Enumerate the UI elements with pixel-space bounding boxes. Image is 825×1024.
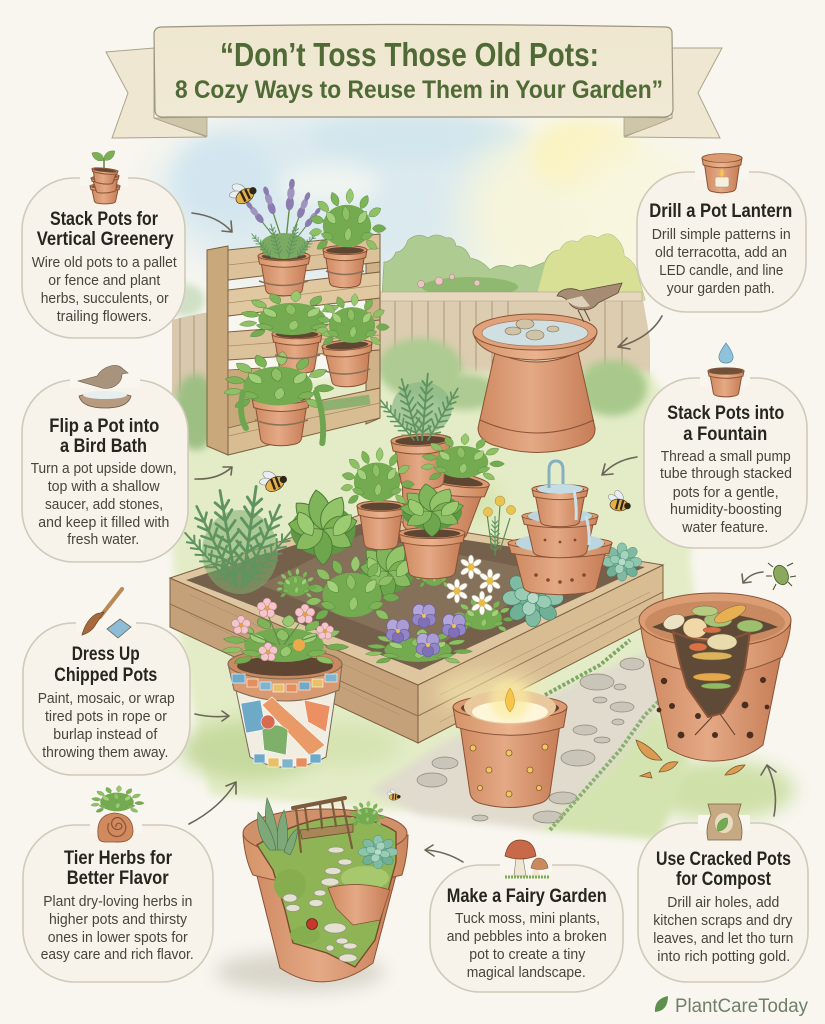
pallet planter	[207, 234, 380, 455]
heading: for Compost	[676, 868, 771, 890]
mosaic tiles	[232, 674, 337, 768]
thyme	[420, 433, 504, 482]
pot body	[236, 690, 336, 768]
body text	[652, 226, 791, 297]
body text: Wire old pots to a pallet	[32, 254, 177, 271]
left ribbon tail	[106, 48, 207, 138]
yellow flowers	[484, 496, 516, 555]
body text: higher pots and thirsty	[49, 911, 187, 928]
panel: dress up chipped pots	[23, 589, 190, 775]
blossoms on hedge	[418, 274, 480, 288]
trailing ivy	[223, 351, 334, 445]
small sprig	[349, 801, 386, 826]
body text: ones in lower spots for	[48, 929, 188, 946]
bee: near fountain	[603, 486, 635, 518]
arrow: to lantern	[618, 316, 662, 349]
basil in bed	[287, 488, 359, 565]
body text: kitchen scraps and dry	[653, 912, 793, 929]
arrow: to fountain	[602, 457, 637, 475]
body text: throwing them away.	[42, 744, 168, 761]
body text: water feature.	[681, 519, 768, 536]
panel: stack pots into a fountain	[644, 343, 807, 548]
beetle	[766, 563, 796, 590]
stone path	[370, 640, 680, 830]
sky wash	[155, 105, 710, 300]
moss and break	[257, 816, 396, 967]
icon: compost bag	[707, 804, 742, 840]
flowers	[221, 598, 349, 666]
heading: Tier Herbs for	[64, 847, 172, 869]
compost scraps	[661, 601, 763, 689]
body text: and pebbles into a broken	[447, 928, 607, 945]
body text: old terracotta, add an	[655, 244, 787, 261]
panel: flip a pot into a bird bath	[22, 365, 188, 562]
body text: pot to create a tiny	[469, 946, 586, 963]
right ribbon tail	[624, 48, 722, 138]
body text: or fence and plant	[48, 272, 161, 289]
logo: PlantCareToday: PlantCareToday	[675, 996, 808, 1017]
body text	[41, 893, 194, 963]
heading: Use Cracked Pots	[656, 848, 791, 870]
heading: Flip a Pot into	[49, 415, 159, 437]
panel: tier herbs for better flavor	[23, 785, 213, 982]
heading	[667, 402, 784, 445]
body text: pots for a gentle,	[673, 484, 779, 501]
body text: Turn a pot upside down,	[31, 460, 177, 477]
basil front	[359, 538, 418, 601]
heading: a Bird Bath	[60, 435, 147, 457]
body text: tube through stacked	[660, 465, 792, 482]
body text: magical landscape.	[467, 964, 586, 981]
arrow: to compost pot	[761, 765, 776, 816]
body text	[32, 254, 177, 325]
small succulent	[602, 543, 642, 581]
body text: herbs, succulents, or	[41, 290, 169, 307]
bee: near bed	[257, 466, 289, 496]
fairy garden pot	[215, 798, 408, 992]
icon: bird on saucer	[78, 365, 131, 408]
body text: easy care and rich flavor.	[41, 946, 194, 963]
bee: small	[385, 787, 402, 803]
heading: Better Flavor	[67, 867, 169, 889]
heading: Vertical Greenery	[37, 228, 174, 250]
heading: Dress Up	[72, 643, 140, 665]
heading: Stack Pots for	[50, 208, 158, 230]
body text: trailing flowers.	[57, 308, 152, 325]
lantern pot	[453, 680, 567, 807]
body text: into rich potting gold.	[657, 948, 790, 965]
parsley pot on bed	[340, 447, 414, 550]
aloe	[258, 798, 298, 855]
panel: drill a pot lantern	[637, 154, 806, 312]
fallen leaves	[636, 740, 745, 778]
title line 2: 8 Cozy Ways to Reuse Them in Your Garden”	[175, 76, 663, 104]
body text	[38, 690, 175, 761]
body text: Thread a small pump	[661, 448, 791, 465]
arrow: to vertical pallet	[192, 213, 232, 232]
mosaic pot with flowers	[221, 598, 349, 768]
rosemary	[179, 485, 297, 594]
cracked compost pot	[636, 593, 791, 778]
mint plant	[239, 290, 346, 339]
parsley pot	[323, 245, 367, 288]
stacked pots cluster	[340, 373, 504, 579]
body text: Paint, mosaic, or wrap	[38, 690, 175, 707]
panel: make a fairy garden	[430, 840, 623, 992]
ladybug	[306, 918, 318, 930]
basil wall pot	[322, 338, 375, 388]
arrow: to fairy garden	[425, 845, 463, 862]
heading: Make a Fairy Garden	[447, 885, 607, 907]
body text: Drill air holes, add	[667, 894, 779, 911]
tilted large pot	[388, 462, 491, 546]
garden bed plants	[179, 485, 642, 664]
panel: stack pots for vertical greenery	[22, 148, 185, 338]
lavender plant	[244, 178, 322, 260]
daisies	[446, 555, 514, 632]
parsley in bed	[305, 556, 400, 622]
seedling center	[416, 553, 453, 588]
body text: and keep it filled with	[38, 514, 169, 531]
wooden fence	[172, 292, 650, 400]
heading: Chipped Pots	[54, 664, 157, 686]
terracotta fountain	[508, 461, 612, 595]
ground: grass wash	[170, 338, 795, 840]
title banner	[106, 24, 722, 138]
raised garden bed	[170, 515, 663, 743]
body text: LED candle, and line	[659, 262, 783, 279]
trailing herb pot	[252, 392, 310, 446]
panel: use cracked pots for compost	[638, 804, 808, 982]
background bushes	[165, 234, 645, 316]
tipped top pot	[391, 433, 453, 491]
icon: water drop over pot	[708, 343, 744, 397]
lavender pot	[258, 251, 310, 296]
basil pot on bed	[399, 483, 466, 579]
body text	[447, 910, 607, 981]
heading: a Fountain	[683, 423, 767, 445]
arrow: to bird bath	[195, 467, 232, 479]
body text: Tuck moss, mini plants,	[455, 910, 600, 927]
seedling	[276, 568, 316, 598]
mint pot	[272, 329, 322, 374]
body text: fresh water.	[67, 531, 139, 548]
large succulent	[503, 569, 563, 627]
air holes	[657, 677, 769, 738]
body text	[31, 460, 177, 548]
parsley plant	[309, 188, 386, 252]
bird on bath	[557, 283, 622, 322]
bird bath pot	[473, 283, 622, 452]
heading: Drill a Pot Lantern	[649, 200, 792, 222]
bee: top left	[226, 177, 260, 209]
basil plant	[315, 293, 389, 347]
body text: Drill simple patterns in	[652, 226, 791, 243]
body text: burlap instead of	[53, 726, 158, 743]
rosemary in top pot	[376, 373, 464, 444]
icon: mushrooms	[505, 840, 550, 877]
body text: humidity-boosting	[670, 501, 782, 518]
body text: your garden path.	[667, 280, 775, 297]
heading	[656, 848, 791, 890]
bench	[293, 798, 353, 852]
icon: paintbrush and tile	[82, 589, 131, 638]
title line 1: “Don’t Toss Those Old Pots:	[220, 36, 599, 73]
rosette	[358, 835, 398, 869]
mini pot	[328, 884, 390, 925]
banner body	[154, 24, 673, 117]
body text	[660, 448, 792, 536]
icon: lantern pot	[702, 154, 742, 193]
pebbles	[283, 847, 357, 962]
body text	[653, 894, 793, 965]
vertical pots and greens	[223, 178, 389, 446]
arrow: to compost bug	[742, 572, 763, 583]
icon: spiral pot and herbs	[90, 785, 144, 842]
violets	[365, 604, 472, 664]
body text: leaves, and let tho turn	[653, 930, 793, 947]
body text: Plant dry-loving herbs in	[43, 893, 192, 910]
arrow: to mosaic pot	[195, 711, 229, 721]
body text: saucer, add stones,	[45, 496, 163, 513]
heading	[64, 847, 172, 889]
heading	[54, 643, 157, 686]
heading: Stack Pots into	[667, 402, 784, 424]
heading	[49, 415, 159, 457]
crack opening	[673, 632, 750, 717]
ribbon folds	[154, 117, 672, 136]
arrow: to tiered herbs	[189, 782, 236, 824]
heading	[37, 208, 174, 250]
body text: top with a shallow	[48, 478, 160, 495]
body text: tired pots in rope or	[45, 708, 167, 725]
icon: stacked pots with sprout	[90, 148, 120, 204]
